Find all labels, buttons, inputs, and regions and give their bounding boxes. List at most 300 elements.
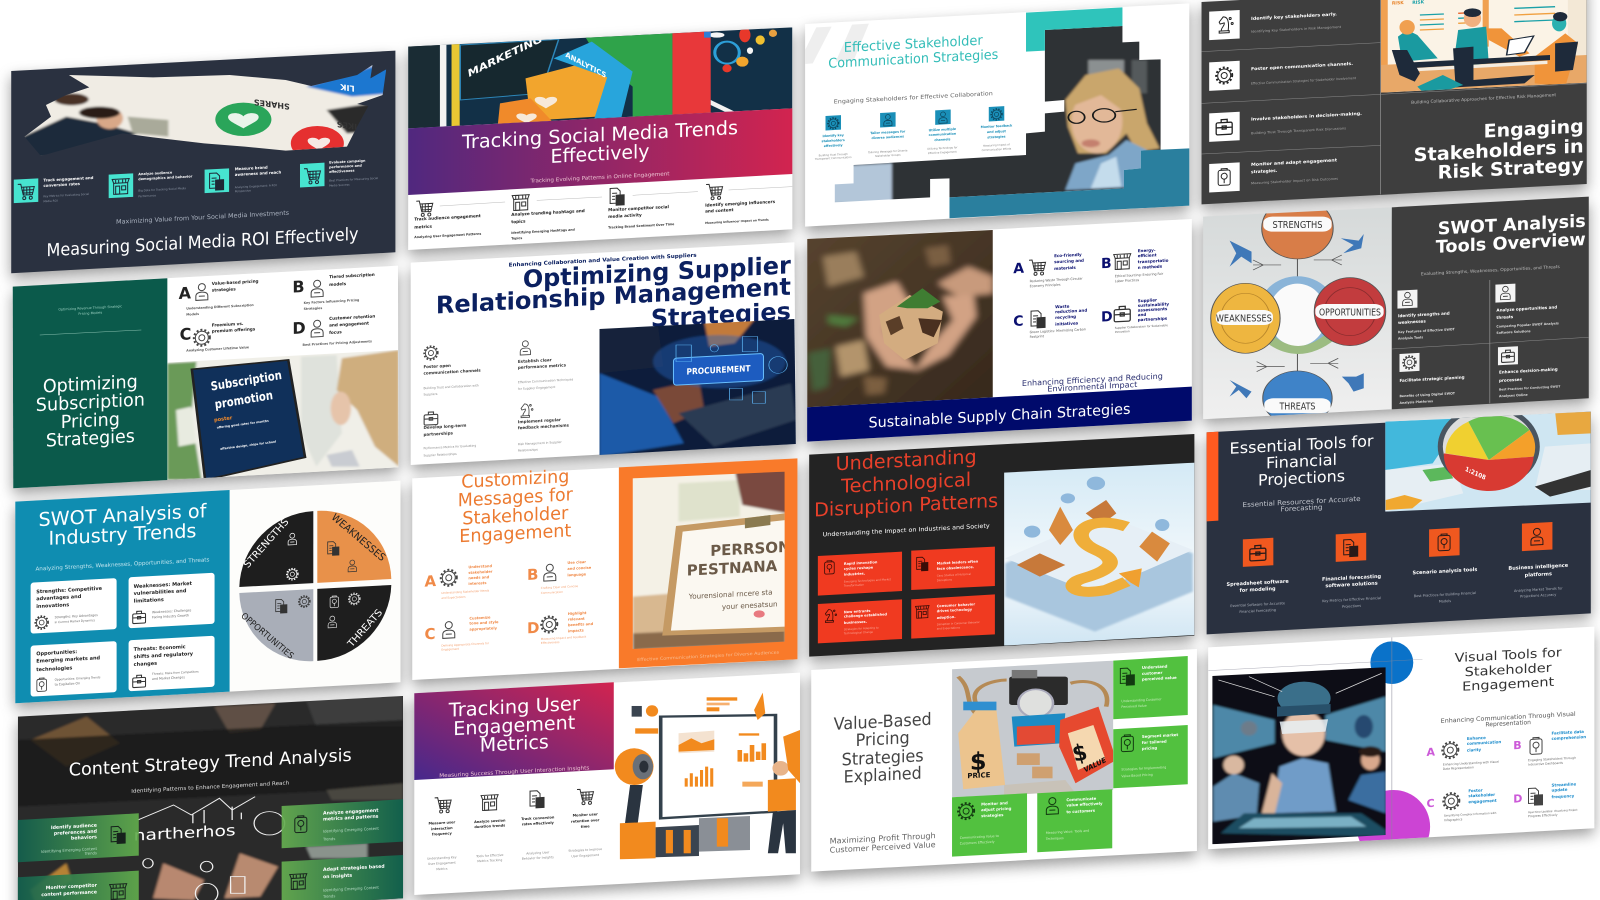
engagement items: stakeholder [1468,792,1495,798]
title: Customizing [461,466,569,493]
orange panel [619,458,797,668]
metric items: Best Practices for Measuring Social [329,176,378,183]
SWOT cards: to Capitalize On [55,681,80,687]
SWOT cards: Strengths: Key Advantages [55,613,98,619]
metric items: Evaluate campaign [329,159,366,165]
stakeholder actions: Monitor and adapt engagement [1251,157,1337,168]
engagement items: comprehension [1552,734,1586,741]
SWOT pie chart: THREATS [345,608,385,650]
engagement items: B [527,565,538,584]
title: Projections [1258,467,1345,490]
green value tiles: Communicating Value to [960,834,999,840]
subtitle: Maximizing Profit Through [830,831,936,846]
sustainability items: assessments [1138,306,1168,313]
trend items: Identify emerging influencers [705,199,776,208]
trend items: Track audience engagement [414,213,481,222]
disruption cards: challenge established [844,612,887,619]
photo: subscription promotion tablet: offering good rates for months [216,419,269,430]
gradient title panel [414,682,614,780]
subtitle: Customer Perceived Value [830,840,936,855]
slide: Visual Tools for Stakeholder Engagement [1208,627,1594,863]
engagement items: B [1513,739,1522,752]
metric items: Strategies to Improve [568,847,602,853]
engagement items: needs and [468,575,490,580]
title: Strategies [46,426,135,452]
title: Stakeholder [462,503,569,529]
SWOT cards: shifts and regulatory [134,651,194,660]
supplier items: feedback mechanisms [518,423,570,430]
metric items: Media ROI [43,199,58,203]
photo: personalised sign: Yourensional rncere sta [688,588,772,601]
metric items [427,789,602,871]
pricing model items: and engagement [329,321,369,328]
stakeholder actions: Identifying Key Stakeholders in Risk Management [1251,25,1342,34]
engagement items: interests [468,581,487,586]
tool items: Software Solutions [1496,329,1531,335]
metric items: Media Success [329,183,350,188]
orange accent bar [1207,432,1218,521]
photo: subscription promotion tablet: effective design, chips for school [220,440,276,451]
SWOT cycle diagram [1203,209,1392,419]
title: Engagement [459,520,571,547]
sustainability items: and [1138,312,1146,317]
tool items: Financial Forecasting [1239,608,1276,614]
sustainability items: D [1101,309,1113,326]
engagement items: benefits and [568,622,594,627]
title: Optimizing [43,371,138,397]
green content panels: content performance [41,889,97,898]
stakeholder items: Effective Engagement [928,150,957,155]
title [436,251,791,333]
blue side panel [15,490,230,703]
tool items: Spreadsheet software [1227,579,1289,588]
stakeholder items: Identify key [822,133,845,138]
mirrored banner labels: SHARES [254,97,290,111]
engagement items: Crafting Clear and Concise [541,584,578,590]
SWOT cards: and Market Changes [152,675,185,681]
engagement items: update [1552,787,1568,793]
green content panels: Analyze engagement [323,808,379,817]
engagement items: tone and style [469,620,499,626]
tool items: Analyze opportunities and [1496,304,1557,313]
SWOT pie chart: OPPORTUNITIES [238,611,295,662]
marketing illustration: ANALYTICS [565,50,607,80]
tool items [1227,522,1569,614]
photo: procurement laptop [597,317,798,457]
panel dividers [1392,280,1589,403]
teal and blue pixel blocks [949,7,1189,218]
stakeholder actions: Effective Communication Strategies for Stakeholder Involvement [1251,76,1357,86]
supplier items: partnerships [423,430,454,437]
tool items: Identify strengths and [1398,311,1450,318]
subtitle: Environmental Impact [1047,380,1137,394]
pricing model items: focus [329,329,342,335]
stakeholder items: Utilizing Technology for [927,145,958,151]
title [1436,212,1586,258]
pricing model items: B [292,277,305,297]
metric items: conversion rates [43,181,81,188]
title: SWOT Analysis [1438,212,1586,239]
green content panels: Trends [322,893,335,899]
title: Technological [840,469,971,498]
pricing model items: Best Practices for Pricing Adjustments [303,339,372,347]
decorative circles [1208,637,1430,863]
metric items: Monitor user [573,812,598,818]
title: Visual Tools for [1455,644,1563,665]
tool items: Facilitate strategic planning [1399,375,1465,383]
metric items: frequency [432,831,452,836]
SWOT cards: changes [134,661,157,668]
pricing model items: Freemium vs. [212,321,244,328]
title: Relationship Management [436,273,791,319]
disruption cards: Transformation [843,583,864,588]
SWOT cycle diagram: WEAKNESSES [1216,314,1272,325]
green content panels: behaviors [71,834,97,842]
sustainability items: sourcing and [1054,258,1084,264]
title: Subscription [36,389,145,416]
trend items: Measuring Influencer Impact on Trends [705,218,769,225]
green value tiles: Understanding Customer [1121,697,1162,703]
title: Tools Overview [1436,230,1586,258]
photo: price tags and camera: PRICE [967,771,991,780]
engagement items: Measuring Impact and Feedback [541,635,587,641]
slide: Optimizing Subscription Pricing Strategies [13,266,402,488]
mirrored banner labels [254,82,357,131]
supplier items: communication channels [423,368,481,376]
green content panels: Identifying Emerging Content [323,885,379,893]
slide: Essential Tools for Financial Projections [1207,405,1593,634]
pricing model items: D [292,318,306,338]
metric items: effectiveness [329,169,354,174]
engagement items: Engaging Stakeholders Through [1528,756,1576,762]
SWOT cards: Threats: Risks from Competitors [151,669,199,676]
photo: subscription promotion tablet: promotion [214,388,274,412]
supplier items: Implement regular [518,417,561,424]
green value tiles: Measuring Value: Tools and [1046,829,1089,835]
SWOT cards: Weaknesses: Challenges [152,608,192,614]
slide: Sustainable Supply Chain Strategies [790,217,1192,442]
SWOT cards: advantages and [36,594,82,602]
supplier items: Relationships [518,448,538,453]
disruption cards: drives technology [937,607,973,613]
title [814,446,998,522]
pricing model items: Tiered subscription [329,272,375,279]
metric items: Analyze audience [138,170,173,176]
pricing model items: Strategies [304,306,322,311]
title: Effectively [550,141,649,168]
side panel text: Optimizing Revenue Through Strategic [58,304,122,312]
green value tiles: pricing [1142,745,1157,751]
metric items: Big Data for Tracking Social Media [138,186,186,193]
pricing model items: models [329,281,347,287]
disruption cards: and Expectations [937,625,961,631]
title: Engagement [453,712,575,740]
subtitle: Evaluating Strengths, Weaknesses, Opportunities, and Threats [1421,264,1560,276]
subtitle: Analyzing Strengths, Weaknesses, Opportunities, and Threats [35,557,210,573]
engagement items: Progress Effectively [1528,813,1558,818]
metric items: Measure brand [235,165,268,171]
stakeholder items: channels [934,137,950,142]
sustainability items: Green Logistics: Minimizing Carbon [1030,327,1086,334]
title [458,466,573,547]
metric items: performance and [329,164,362,169]
title: Optimizing Supplier [523,251,791,294]
engagement items: engagement [1468,798,1497,804]
green value tiles: Perceived Value [1121,704,1147,709]
side panel text [40,304,141,335]
metric items: Track engagement and [43,175,94,183]
engagement items [424,560,594,652]
green content panels: metrics and patterns [323,814,379,823]
title: Strategies [842,746,924,770]
tool items: platforms [1525,571,1552,579]
pricing model items: C [180,324,191,344]
engagement items: C [1427,797,1435,810]
title: Value-Based [834,710,932,735]
disruption cards: cycles reshape [844,565,874,571]
stakeholder items: Monitor feedback [981,123,1013,129]
pricing model items: Analyzing Customer Lifetime Value [186,345,249,353]
tool items: Analyzing Market Trends for [1514,586,1563,593]
title: Messages for [458,484,573,511]
subtitle: Building Collaborative Approaches for Effective Risk Management [1411,92,1557,105]
engagement items: Customize [469,616,491,621]
sustainability items: n methods [1138,264,1163,270]
green value tiles: adjust pricing [981,806,1012,812]
trend items [414,184,792,241]
tool items: Best Practices for Building Financial [1414,591,1476,598]
SWOT pie chart [238,507,391,665]
sustainability items: efficient [1138,252,1157,258]
metric items: Track conversion [521,815,555,821]
sustainability items: materials [1054,265,1076,271]
slide: Engaging Stakeholders in Risk Strategy [1202,0,1587,204]
stakeholder actions [1209,10,1362,192]
title: Disruption Patterns [814,490,998,522]
engagement items: Foster [1468,788,1483,793]
green value tiles [952,656,1188,857]
photo: personalised sign: PESTNANA [687,557,778,580]
engagement items: Real-Time Updates: Visualizing Project [1528,808,1577,814]
stakeholder items: and adjust [987,129,1006,134]
sustainability items: Supplier Collaboration for Sustainable [1115,323,1168,330]
green value tiles: to customers [1066,808,1096,814]
title: Explained [844,764,922,788]
supplier items: Foster open [423,363,451,369]
slide: Measuring Social Media ROI Effectively [11,51,395,273]
green content panels: Monitor competitor [46,883,98,891]
stakeholder items: Measuring Impact of [983,142,1010,148]
stakeholder actions: Involve stakeholders in decision-making. [1251,111,1362,123]
tool items: Essential Software for Accurate [1230,601,1285,608]
metric items: interaction [431,826,453,831]
sustainability items: A [1013,261,1024,277]
subtitle: Forecasting [1281,503,1323,513]
pricing model items: Understanding Different Subscription [186,303,254,311]
engagement items: D [1513,792,1522,806]
title: Stakeholders in [1414,136,1584,166]
photo: price tags and camera [951,658,1116,800]
sustainability items: partnerships [1138,316,1168,322]
SWOT cards: limitations [134,597,164,605]
green value tiles: Understand [1142,664,1168,670]
supplier items: Performance Metrics for Evaluating [423,443,476,450]
slide: Understanding Technological Disruption Patterns [809,434,1198,657]
metric items: Perspective [235,188,251,193]
stakeholder items: effectively [824,143,843,148]
supplier items: performance metrics [518,362,567,370]
disruption cards: Market leaders often [937,559,979,566]
tool items: Analysis Platforms [1399,399,1433,405]
subtitle: Representation [1485,719,1531,729]
sustainability items: B [1101,256,1112,272]
tool items: Key Features of Effective SWOT [1398,327,1456,334]
engagement items: Enhancing Understanding with Visual [1443,760,1499,767]
trend items: and content [705,207,734,214]
photo: personalised sign [632,472,785,649]
photo: hands holding paper globe [807,230,993,408]
sustainability items: sustainability [1138,301,1169,308]
pricing model items: Customer retention [329,314,375,321]
tool items: software solutions [1325,581,1378,589]
engagement items: A [424,572,436,591]
sustainability items: Labor Practices [1115,278,1140,283]
engagement items: C [424,625,435,643]
SWOT cards: Facing Industry Growth [152,613,189,619]
torn-edge photo banner [24,65,386,156]
metric items [14,159,378,203]
sustainability items: Supplier [1138,297,1157,303]
title [834,710,932,788]
green side panel [13,278,167,488]
tool items: Analyses Online [1499,393,1528,398]
title: Essential Tools for [1230,432,1374,458]
pricing model items: strategies [212,286,236,293]
engagement items: Use clear [567,560,586,565]
disruption cards: industries. [844,572,865,577]
SWOT cycle diagram: OPPORTUNITIES [1319,308,1381,319]
title: Metrics [480,731,549,757]
tool items: Analysis Tools [1398,335,1423,341]
supplier items: Establish clear [518,357,552,364]
photo: price tags and camera: $ [1070,740,1090,768]
photo: magnifier over pie chart: 1:2108 [1464,466,1486,482]
pixel-edged photo of woman at chalkboard [831,23,1167,207]
green content panels: on insights [323,873,352,880]
metric items: awareness and reach [235,170,281,177]
footer caption: Effective Communication Strategies for Diverse Audiences [637,650,779,662]
engagement items: D [527,619,539,637]
disruption cards: New entrants [844,609,871,614]
stakeholder actions: Building Trust Through Transparent Risk Discussions [1251,126,1346,135]
tool items: Best Practices for Conducting SWOT [1499,384,1561,392]
sustainability items: recycling [1055,314,1076,320]
decorative quotation marks [805,24,869,64]
title: Stakeholder [1465,660,1553,679]
SWOT cards: vulnerabilities and [134,588,187,597]
supplier items: Suppliers [423,392,438,397]
engagement items: Interactive Dashboards [1528,761,1563,767]
small heading: Enhancing Collaboration and Value Creation with Suppliers [509,253,697,269]
slide: Tracking Social Media Trends Effectively [406,25,796,250]
engagement items: impacts [568,628,584,633]
engagement items: clarity [1467,747,1482,753]
stakeholder items: strategies [987,134,1006,139]
engagement items: Data Representation [1443,765,1474,771]
tool items: Key Metrics for Effective Financial [1322,596,1381,603]
title: Effective Stakeholder [844,33,983,56]
title [1414,116,1584,184]
title: Tracking User [448,693,580,722]
engagement items: A [1427,746,1436,759]
pricing model items: A [179,283,192,303]
tool items [1397,284,1561,405]
disruption cards: Technological Change [843,630,873,635]
metric items: rates effectively [522,821,555,826]
engagement items: Facilitate data [1552,729,1584,736]
SWOT cards: Opportunities: [36,649,77,657]
stakeholder actions: Foster open communication channels. [1251,61,1353,72]
trend items: Topics [511,236,522,241]
disruption cards: Emerging Technologies and Market [844,577,891,584]
title [1455,644,1563,694]
green value tiles: perceived value [1142,675,1177,682]
SWOT pie chart: STRENGTHS [242,517,291,570]
tool items: Benefits of Using Digital SWOT [1399,391,1456,398]
title: Financial [1266,451,1337,473]
green value tiles: strategies [981,812,1004,818]
engagement items: Infographics [1444,817,1463,822]
sustainability items [1013,247,1169,339]
disruption cards [818,547,995,643]
title: Sustainable Supply Chain Strategies [868,402,1130,432]
trend items: Identifying Emerging Hashtags and [511,228,576,235]
supplier items: Supplier Relationships [423,452,457,458]
photo: magnifier over pie chart [1382,405,1593,513]
tool items: Comparing Popular SWOT Analysis [1496,321,1559,329]
marketing illustration [406,25,796,132]
pricing model items: Models [186,312,199,317]
metric items: Metrics Tracking [477,858,502,863]
stakeholder items: Tailoring Messages for Diverse [868,148,908,154]
slide: SWOT Analysis Tools Overview [1201,197,1589,426]
stakeholder items: Building Trust Through [819,152,848,157]
stakeholder items: Utilize multiple [929,127,956,132]
engagement items: and Expectations [441,595,466,600]
analytics illustration [615,693,800,859]
tool items: Scenario analysis tools [1412,567,1477,576]
engagement items: Enhance [1467,735,1486,741]
metric items: retention over [571,818,600,824]
engagement items: frequency [1552,793,1575,799]
slide: Optimizing Supplier Relationship Management Strategies [411,242,798,465]
stakeholder items: diverse audiences [871,134,904,140]
disruption cards: Disruptions [937,577,953,582]
subtitle: Enhancing Communication Through Visual [1441,711,1576,725]
trend items: Analyzing User Engagement Patterns [414,232,481,239]
team meeting illustration: RISK [1392,0,1404,7]
tool items: Enhance decision-making [1499,367,1558,375]
subtitle: Enhancing Efficiency and Reducing [1022,372,1163,388]
supplier items: Building Trust and Collaboration with [423,383,479,390]
photo: personalised sign: PERRSONAL [710,537,812,560]
title [38,500,208,550]
title: Pricing [61,409,120,433]
slide: Content Strategy Trend Analysis [15,693,408,900]
gradient title band [408,108,792,195]
green content panels [18,799,403,900]
green content panels: Identifying Emerging Content [41,846,97,854]
